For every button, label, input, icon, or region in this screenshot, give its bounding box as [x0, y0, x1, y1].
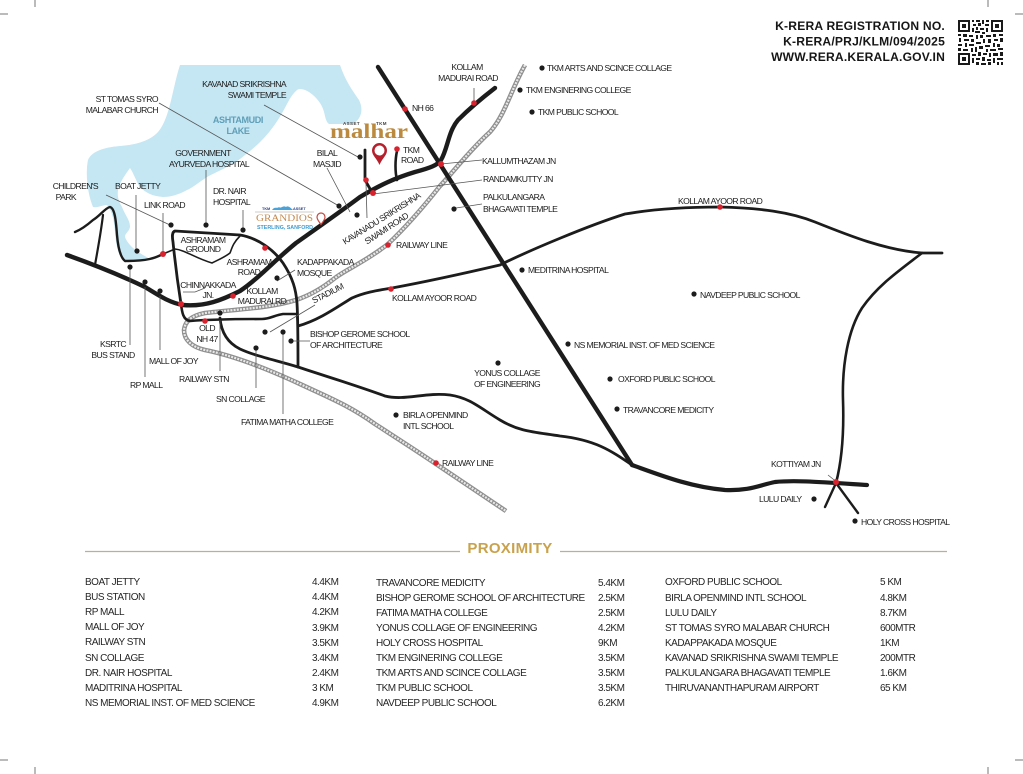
map labels: BILAL	[317, 148, 338, 158]
logo: Asset TKM Malhar with location pin	[330, 119, 408, 165]
map labels: KOLLAM	[246, 286, 278, 296]
map labels: LINK ROAD	[144, 200, 185, 210]
map labels: GROUND	[186, 244, 221, 254]
proximity table: column 1: 3.9KM	[312, 623, 339, 634]
map labels: TRAVANCORE MEDICITY	[623, 405, 714, 415]
map labels: RANDAMKUTTY JN	[483, 174, 553, 184]
logo: Asset TKM Malhar with location pin: ASSET	[343, 121, 360, 126]
proximity table: column 1: 3 KM	[312, 683, 334, 694]
proximity table: column 3: LULU DAILY	[665, 608, 717, 619]
proximity table: column 3: 4.8KM	[880, 593, 907, 604]
QR code	[958, 20, 1003, 65]
map labels: MALL OF JOY	[149, 356, 199, 366]
RERA registration text: K-RERA REGISTRATION NO.	[775, 19, 945, 33]
proximity table: column 1: 3.5KM	[312, 638, 339, 649]
proximity table: column 1: RP MALL	[85, 607, 125, 618]
map labels: KAVANADU SRIKRISHNA	[341, 190, 423, 246]
logo: Grandios Sterling Sanford: STERLING, SANFORD	[257, 225, 313, 231]
black location dots	[127, 65, 858, 524]
map labels: KALLUMTHAZAM JN	[482, 156, 556, 166]
proximity table: column 3: PALKULANGARA BHAGAVATI TEMPLE	[665, 668, 831, 679]
road network	[67, 67, 942, 513]
leader lines	[106, 88, 838, 483]
RERA registration text: K-RERA/PRJ/KLM/094/2025	[783, 34, 945, 48]
proximity table: column 3: 200MTR	[880, 653, 916, 664]
map labels: NH 66	[412, 103, 434, 113]
map labels: KOTTIYAM JN	[771, 459, 821, 469]
proximity table: column 2: TKM PUBLIC SCHOOL	[376, 683, 473, 694]
proximity table: column 2: YONUS COLLAGE OF ENGINEERING	[376, 623, 538, 634]
railway line	[184, 65, 525, 511]
map labels: INTL SCHOOL	[403, 421, 454, 431]
proximity table: column 3: KAVANAD SRIKRISHNA SWAMI TEMPLE	[665, 653, 839, 664]
logo: Asset TKM Malhar with location pin: malhar	[330, 119, 408, 143]
proximity table: column 3: THIRUVANANTHAPURAM AIRPORT	[665, 683, 819, 694]
map labels: KSRTC	[100, 339, 126, 349]
map labels: DR. NAIR	[213, 186, 246, 196]
map labels: BOAT JETTY	[115, 181, 161, 191]
map labels: KOLLAM AYOOR ROAD	[678, 196, 763, 206]
proximity table: column 3: 1.6KM	[880, 668, 907, 679]
proximity table: column 2: 9KM	[598, 638, 617, 649]
proximity table: column 1: MALL OF JOY	[85, 622, 145, 633]
proximity table: column 3	[665, 577, 916, 694]
proximity heading: PROXIMITY	[467, 540, 553, 557]
proximity table: column 2: TKM ARTS AND SCINCE COLLAGE	[376, 668, 527, 679]
proximity table: column 2: 3.5KM	[598, 668, 625, 679]
map labels: OF ARCHITECTURE	[310, 340, 383, 350]
logo: Grandios Sterling Sanford: ASSET	[293, 207, 306, 211]
proximity table: column 1: 4.9KM	[312, 698, 339, 709]
lake label: LAKE	[226, 126, 250, 136]
proximity table: column 1: 4.4KM	[312, 592, 339, 603]
proximity table: column 1: 3.4KM	[312, 653, 339, 664]
proximity table: column 3: 600MTR	[880, 623, 916, 634]
RERA registration text	[771, 19, 945, 64]
proximity table: column 3: KADAPPAKADA MOSQUE	[665, 638, 777, 649]
map labels: MADURAI ROAD	[438, 73, 498, 83]
map labels: OF ENGINEERING	[474, 379, 541, 389]
lake label	[213, 115, 263, 136]
map labels: TKM PUBLIC SCHOOL	[538, 107, 619, 117]
proximity table: column 1: 4.2KM	[312, 607, 339, 618]
map labels: FATIMA MATHA COLLEGE	[241, 417, 334, 427]
map labels: KOLLAM	[451, 62, 483, 72]
map labels: PARK	[56, 192, 77, 202]
proximity table: column 1: NS MEMORIAL INST. OF MED SCIENCE	[85, 698, 256, 709]
map labels: BUS STAND	[91, 350, 135, 360]
map labels: GOVERNMENT	[175, 148, 232, 158]
Ashtamudi lake	[87, 65, 361, 262]
map labels: KOLLAM AYOOR ROAD	[392, 293, 477, 303]
proximity table: column 2: 2.5KM	[598, 608, 625, 619]
map labels: OLD	[199, 323, 215, 333]
map labels: MASJID	[313, 159, 341, 169]
proximity table: column 2: TKM ENGINERING COLLEGE	[376, 653, 503, 664]
logo: Grandios Sterling Sanford: GRANDIOS	[256, 214, 313, 224]
map labels: KAVANAD SRIKRISHNA	[202, 79, 287, 89]
map labels: ST TOMAS SYRO	[96, 94, 159, 104]
map labels: MALABAR CHURCH	[86, 105, 158, 115]
lake label: ASHTAMUDI	[213, 115, 263, 125]
map labels: NS MEMORIAL INST. OF MED SCIENCE	[574, 340, 715, 350]
proximity table: column 3: 5 KM	[880, 577, 902, 588]
proximity table: column 2: 3.5KM	[598, 653, 625, 664]
proximity table: column 1: MADITRINA HOSPITAL	[85, 683, 183, 694]
proximity table: column 2: 2.5KM	[598, 593, 625, 604]
map labels: SWAMI TEMPLE	[228, 90, 287, 100]
map labels: NAVDEEP PUBLIC SCHOOL	[700, 290, 801, 300]
red junction markers	[160, 100, 839, 485]
logo: Grandios Sterling Sanford: TKM	[262, 207, 270, 211]
proximity table: column 1	[85, 577, 339, 709]
map labels: CHINNAKKADA	[180, 280, 237, 290]
RERA registration text: WWW.RERA.KERALA.GOV.IN	[771, 50, 945, 64]
proximity table: column 2: 4.2KM	[598, 623, 625, 634]
map labels: RP MALL	[130, 380, 163, 390]
map labels: ASHRAMAM	[227, 257, 272, 267]
map labels: HOSPITAL	[213, 197, 251, 207]
proximity table: column 2: 5.4KM	[598, 578, 625, 589]
map labels: AYURVEDA HOSPITAL	[169, 159, 250, 169]
map labels: RAILWAY LINE	[396, 240, 448, 250]
logo: Asset TKM Malhar with location pin: TKM	[376, 121, 387, 126]
map labels: MOSQUE	[297, 268, 332, 278]
map labels: MEDITRINA HOSPITAL	[528, 265, 609, 275]
map labels: ROAD	[238, 267, 261, 277]
proximity table: column 1: 4.4KM	[312, 577, 339, 588]
map labels: YONUS COLLAGE	[474, 368, 541, 378]
map labels: ROAD	[401, 155, 424, 165]
map labels: BHAGAVATI TEMPLE	[483, 204, 558, 214]
map labels: CHILDREN'S	[53, 181, 99, 191]
proximity table: column 1: BUS STATION	[85, 592, 145, 603]
map labels: PALKULANGARA	[483, 192, 545, 202]
map labels: NH 47	[196, 334, 218, 344]
map labels: BIRLA OPENMIND	[403, 410, 468, 420]
map labels	[53, 62, 950, 527]
proximity table: column 2: FATIMA MATHA COLLEGE	[376, 608, 488, 619]
map labels: KADAPPAKADA	[297, 257, 355, 267]
map labels: SWAMI ROAD	[363, 210, 410, 246]
map labels: STADIUM	[310, 281, 345, 305]
proximity table: column 2: BISHOP GEROME SCHOOL OF ARCHITECTURE	[376, 593, 586, 604]
map labels: SN COLLAGE	[216, 394, 266, 404]
proximity table: column 3: 1KM	[880, 638, 899, 649]
proximity table: column 1: DR. NAIR HOSPITAL	[85, 668, 173, 679]
map labels: BISHOP GEROME SCHOOL	[310, 329, 410, 339]
proximity table: column 3: OXFORD PUBLIC SCHOOL	[665, 577, 783, 588]
map labels: JN.	[202, 290, 214, 300]
map labels: RAILWAY STN	[179, 374, 229, 384]
map labels: ASHRAMAM	[181, 235, 226, 245]
proximity table: column 3: BIRLA OPENMIND INTL SCHOOL	[665, 593, 807, 604]
proximity table: column 2: 6.2KM	[598, 698, 625, 709]
map labels: MADURAI RD	[238, 296, 287, 306]
map labels: RAILWAY LINE	[442, 458, 494, 468]
proximity table: column 1: BOAT JETTY	[85, 577, 140, 588]
map labels: OXFORD PUBLIC SCHOOL	[618, 374, 716, 384]
proximity table: column 3: ST TOMAS SYRO MALABAR CHURCH	[665, 623, 830, 634]
proximity table: column 2: HOLY CROSS HOSPITAL	[376, 638, 484, 649]
map labels: LULU DAILY	[759, 494, 802, 504]
map labels: TKM ARTS AND SCINCE COLLAGE	[547, 63, 672, 73]
proximity table: column 2: 3.5KM	[598, 683, 625, 694]
map labels: TKM ENGINERING COLLEGE	[526, 85, 632, 95]
map labels: HOLY CROSS HOSPITAL	[861, 517, 950, 527]
proximity table: column 2: NAVDEEP PUBLIC SCHOOL	[376, 698, 497, 709]
proximity table: column 2	[376, 578, 625, 709]
proximity table: column 2: TRAVANCORE MEDICITY	[376, 578, 486, 589]
map labels: TKM	[403, 145, 420, 155]
proximity table: column 3: 65 KM	[880, 683, 907, 694]
proximity table: column 1: SN COLLAGE	[85, 653, 145, 664]
proximity table: column 3: 8.7KM	[880, 608, 907, 619]
proximity table: column 1: 2.4KM	[312, 668, 339, 679]
logo: Grandios Sterling Sanford	[255, 206, 325, 231]
proximity table: column 1: RAILWAY STN	[85, 637, 146, 648]
